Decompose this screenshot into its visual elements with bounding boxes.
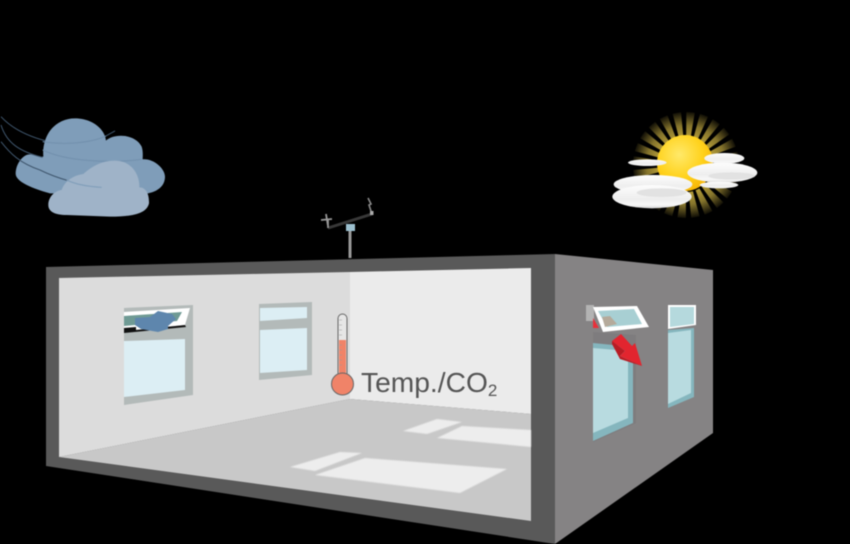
right wall bbox=[350, 268, 531, 414]
left wall bbox=[59, 272, 350, 457]
icon: sun with clouds bbox=[612, 125, 757, 208]
floor bbox=[59, 399, 531, 521]
side window: right bbox=[668, 305, 696, 408]
icon: thermometer bbox=[332, 314, 354, 395]
building front frame bbox=[46, 254, 555, 544]
room interior bbox=[59, 268, 531, 521]
icon: rooftop weather station bbox=[321, 198, 374, 258]
arrow: outgoing air bbox=[612, 334, 642, 366]
sunlight patches on floor bbox=[290, 419, 531, 493]
icon: windy cloud bbox=[1, 117, 165, 217]
interior window: closed bbox=[259, 302, 312, 380]
arrow: incoming air bbox=[135, 311, 176, 332]
side window: open casement with airflow bbox=[586, 305, 649, 442]
interior window: open with blue airflow bbox=[124, 305, 193, 405]
building side wall bbox=[555, 254, 713, 544]
label: Temp./CO2: 2 bbox=[488, 381, 497, 400]
label: Temp./CO2: Temp./CO bbox=[361, 366, 488, 398]
